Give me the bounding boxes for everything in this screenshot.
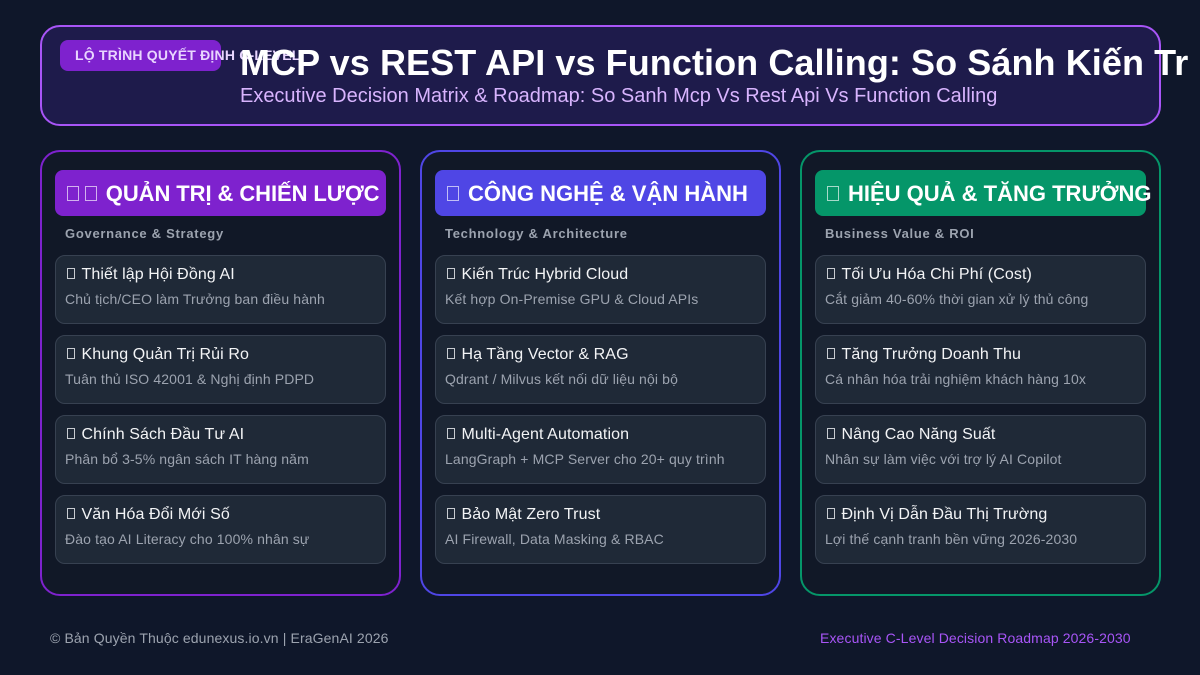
card: cost: [815, 255, 1146, 324]
card: cost: Cắt giảm 40-60% thời gian xử lý thủ công: [825, 291, 1088, 307]
title: MCP vs REST API vs Function Calling: So Sánh Kiến Tr: [240, 42, 1188, 83]
card: investment policy: Chính Sách Đầu Tư AI: [82, 426, 244, 443]
card: revenue: Cá nhân hóa trải nghiệm khách hàng 10x: [825, 371, 1086, 387]
badge text: LỘ TRÌNH QUYẾT ĐỊNH C-LEVEL: [75, 47, 301, 63]
card: risk framework: [55, 335, 386, 404]
card: investment policy: Phân bổ 3-5% ngân sách IT hàng năm: [65, 451, 309, 467]
heading: business value: [815, 170, 1146, 216]
heading: governance: [55, 170, 386, 216]
card: multi-agent: LangGraph + MCP Server cho 20+ quy trình: [445, 451, 725, 467]
card: AI council: Thiết lập Hội Đồng AI: [82, 266, 235, 283]
card: digital culture: [55, 495, 386, 564]
card: cost: Tối Ưu Hóa Chi Phí (Cost): [842, 266, 1032, 283]
card: market leadership: Lợi thế cạnh tranh bền vững 2026-2030: [825, 531, 1077, 547]
card: market leadership: [815, 495, 1146, 564]
panel: business value: [800, 150, 1161, 596]
card: vector and RAG: Hạ Tầng Vector & RAG: [462, 346, 629, 363]
card: multi-agent: Multi-Agent Automation: [462, 426, 629, 443]
card: AI council: [55, 255, 386, 324]
card: productivity: Nâng Cao Năng Suất: [842, 426, 995, 443]
panel: technology: [420, 150, 781, 596]
card: vector and RAG: Qdrant / Milvus kết nối dữ liệu nội bộ: [445, 371, 678, 387]
card: revenue: [815, 335, 1146, 404]
card: investment policy: [55, 415, 386, 484]
header panel: [40, 25, 1161, 126]
card: hybrid cloud: Kiến Trúc Hybrid Cloud: [462, 266, 628, 283]
card: vector and RAG: [435, 335, 766, 404]
card: productivity: [815, 415, 1146, 484]
heading text: business value: HIỆU QUẢ & TĂNG TRƯỞNG: [848, 181, 1151, 206]
card: hybrid cloud: Kết hợp On-Premise GPU & Cloud APIs: [445, 291, 698, 307]
card: AI council: Chủ tịch/CEO làm Trưởng ban điều hành: [65, 291, 325, 307]
heading text: technology: CÔNG NGHỆ & VẬN HÀNH: [468, 181, 748, 206]
subheading: technology: Technology & Architecture: [445, 226, 628, 241]
card: digital culture: Đào tạo AI Literacy cho 100% nhân sự: [65, 531, 309, 547]
card: hybrid cloud: [435, 255, 766, 324]
footer: copyright: © Bản Quyền Thuộc edunexus.io.vn | EraGenAI 2026: [50, 630, 389, 646]
panel: governance: [40, 150, 401, 596]
footer: roadmap label: Executive C-Level Decision Roadmap 2026-2030: [820, 630, 1131, 646]
card: revenue: Tăng Trưởng Doanh Thu: [842, 346, 1021, 363]
card: productivity: Nhân sự làm việc với trợ lý AI Copilot: [825, 451, 1062, 467]
subtitle: Executive Decision Matrix & Roadmap: So Sanh Mcp Vs Rest Api Vs Function Calling: [240, 85, 997, 107]
subheading: business value: Business Value & ROI: [825, 226, 975, 241]
heading text: governance: QUẢN TRỊ & CHIẾN LƯỢC: [106, 181, 379, 206]
card: zero trust: [435, 495, 766, 564]
card: zero trust: Bảo Mật Zero Trust: [462, 506, 600, 523]
card: digital culture: Văn Hóa Đổi Mới Số: [82, 506, 230, 523]
heading: technology: [435, 170, 766, 216]
card: market leadership: Định Vị Dẫn Đầu Thị Trường: [842, 506, 1047, 523]
badge: [60, 40, 221, 71]
subheading: governance: Governance & Strategy: [65, 226, 224, 241]
card: zero trust: AI Firewall, Data Masking & RBAC: [445, 531, 664, 547]
card: risk framework: Tuân thủ ISO 42001 & Nghị định PDPD: [65, 371, 314, 387]
card: risk framework: Khung Quản Trị Rủi Ro: [82, 346, 249, 363]
card: multi-agent: [435, 415, 766, 484]
